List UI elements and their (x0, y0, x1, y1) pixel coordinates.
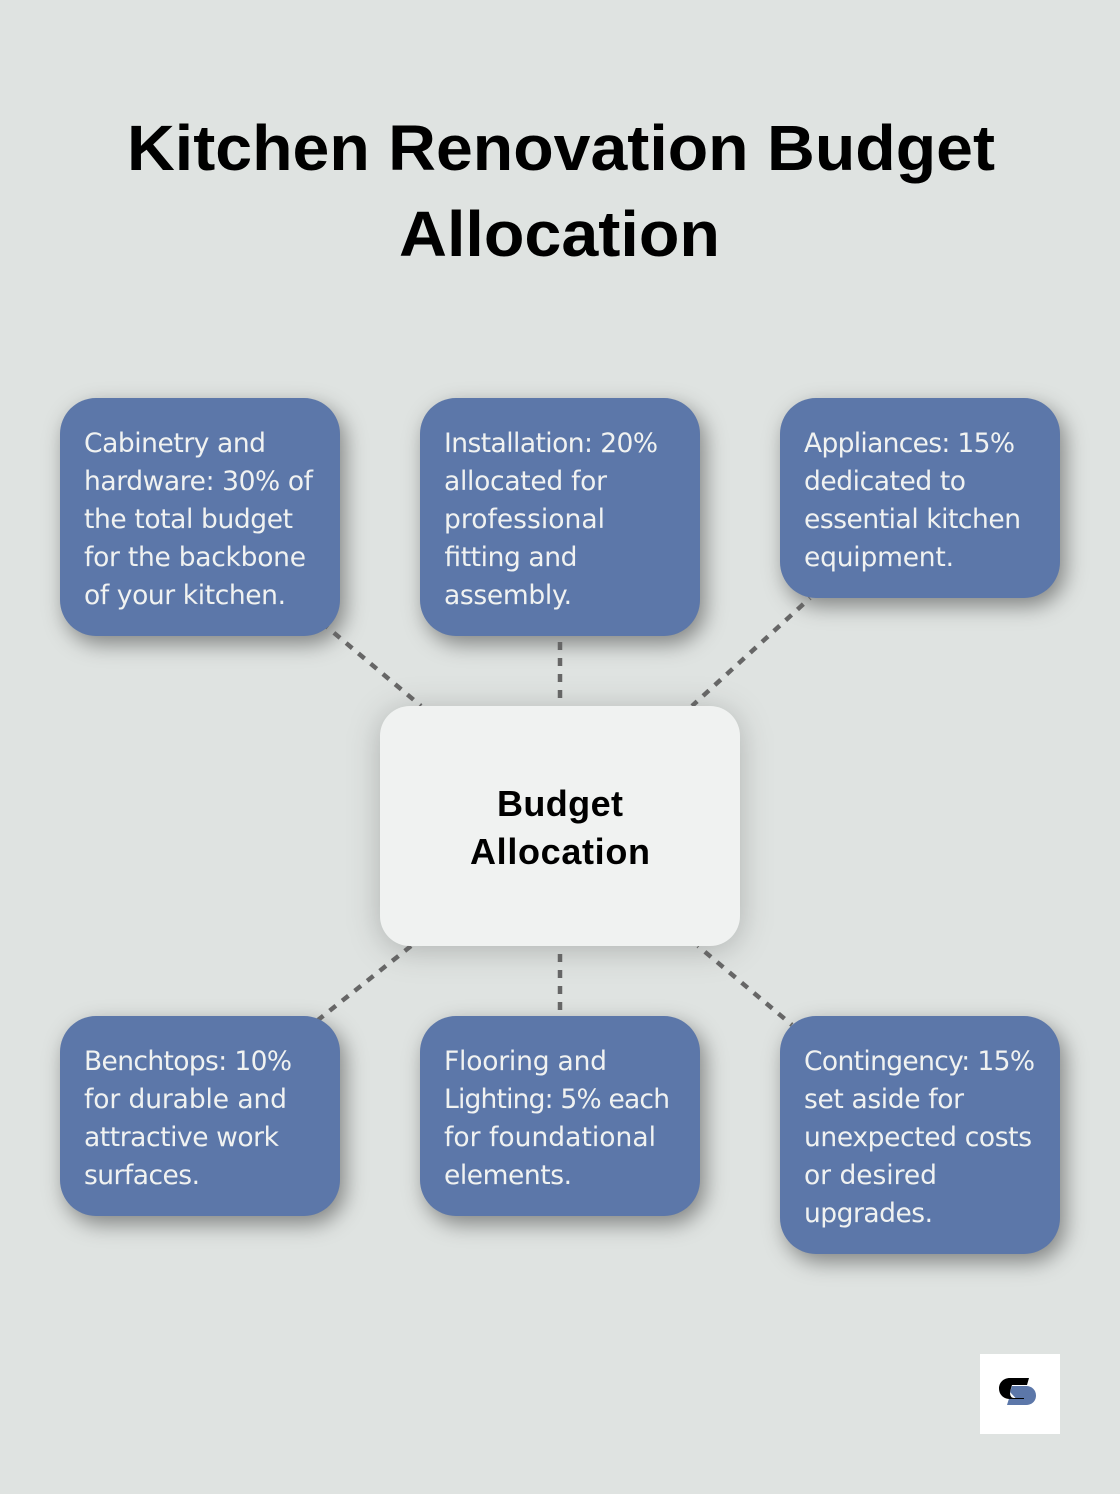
panel: cabinetry and hardware: the total budget (84, 504, 293, 535)
panel: centre budget allocation: Budget (497, 783, 623, 824)
title (127, 112, 995, 270)
panel: contingency (780, 1016, 1060, 1254)
connector: installation to centre (558, 642, 562, 698)
panel: installation: Installation: 20% (444, 428, 658, 459)
connector: appliances to centre (692, 598, 810, 706)
connector: cabinetry to centre (327, 627, 421, 706)
panel: flooring and lighting (420, 1016, 700, 1216)
panel: installation: professional (444, 504, 605, 535)
panel: appliances: Appliances: 15% (804, 428, 1015, 459)
panel: appliances: equipment. (804, 542, 954, 573)
panel: benchtops: attractive work (84, 1122, 280, 1153)
panel: installation: fitting and (444, 542, 577, 573)
panel: benchtops: for durable and (84, 1084, 287, 1115)
panel: cabinetry and hardware: of your kitchen. (84, 580, 286, 611)
logo (980, 1354, 1060, 1434)
panel: flooring and lighting: elements. (444, 1160, 572, 1191)
panel: contingency: upgrades. (804, 1198, 933, 1229)
panel: contingency: Contingency: 15% (804, 1046, 1035, 1077)
panel: cabinetry and hardware: Cabinetry and (84, 428, 266, 459)
panel: installation: assembly. (444, 580, 572, 611)
panel: centre budget allocation: Allocation (470, 831, 650, 872)
title: Kitchen Renovation Budget (127, 112, 995, 184)
panel: contingency: unexpected costs (804, 1122, 1032, 1153)
panel: flooring and lighting: Lighting: 5% each (444, 1084, 670, 1115)
connector: benchtops to centre (318, 946, 411, 1020)
connector: contingency to centre (698, 946, 792, 1025)
panel: contingency: set aside for (804, 1084, 964, 1115)
panel: contingency: or desired (804, 1160, 937, 1191)
panel: cabinetry and hardware: hardware: 30% of (84, 466, 314, 497)
panel: appliances: essential kitchen (804, 504, 1021, 535)
panel: cabinetry and hardware: for the backbone (84, 542, 306, 573)
panel: benchtops: Benchtops: 10% (84, 1046, 292, 1077)
panel: benchtops (60, 1016, 340, 1216)
connector: flooring to centre (558, 954, 562, 1010)
panel: installation: allocated for (444, 466, 607, 497)
title: Allocation (399, 198, 720, 270)
panel: installation (420, 398, 700, 636)
panel: centre budget allocation (380, 706, 740, 946)
panel: flooring and lighting: for foundational (444, 1122, 656, 1153)
panel: appliances: dedicated to (804, 466, 966, 497)
panel: benchtops: surfaces. (84, 1160, 200, 1191)
panel: flooring and lighting: Flooring and (444, 1046, 607, 1077)
panel: cabinetry and hardware (60, 398, 340, 636)
panel: appliances (780, 398, 1060, 598)
